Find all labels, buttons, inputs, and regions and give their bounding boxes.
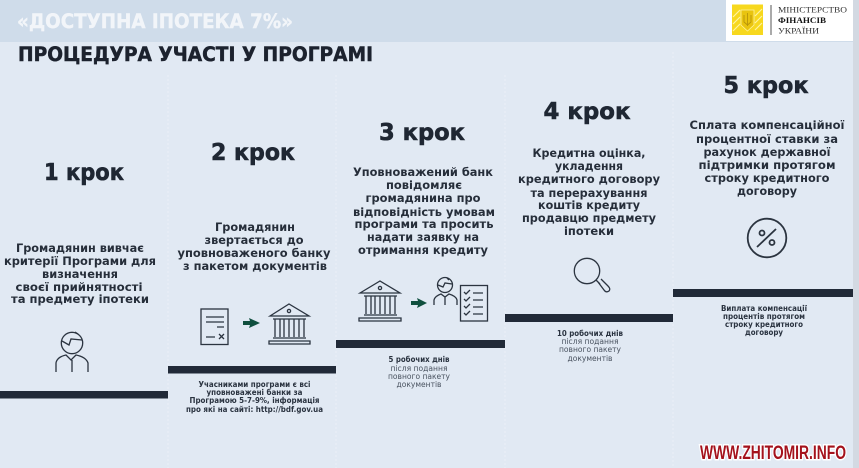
icon: person	[434, 278, 457, 305]
text block: step 3 description: повідомляє	[386, 178, 462, 192]
text block: step 5 description: Сплата компенсаційної	[690, 118, 845, 132]
text block: step 4 note: документів	[568, 353, 613, 363]
heading: 4 крок: 4 крок	[544, 99, 631, 125]
panel: step 5	[673, 73, 853, 337]
text block: step 5 description: договору	[737, 184, 797, 198]
text block: step 4 description: та перерахування	[530, 186, 648, 200]
text block: step 1 description: визначення	[42, 267, 118, 281]
text block: step 4 note: повного пакету	[559, 344, 621, 354]
text block: step 1 description: Громадянин вивчає	[16, 241, 144, 255]
text block: step 5 description	[690, 118, 845, 198]
icon: yellow emblem	[732, 4, 763, 35]
text block: step 3 note: після подання	[390, 363, 448, 373]
heading: 2 крок: 2 крок	[211, 140, 295, 166]
text block: step 4 description: іпотеки	[564, 224, 614, 238]
text block: step 4 note: після подання	[562, 336, 619, 346]
text block: step 4 description: коштів кредиту	[538, 198, 640, 212]
text block: step 5 note: строку кредитного	[725, 319, 803, 329]
bar	[505, 314, 673, 322]
text block: step 3 description: громадянина про	[366, 191, 481, 205]
title: «ДОСТУПНА ІПОТЕКА 7%»	[17, 10, 293, 33]
icon: document	[201, 309, 228, 344]
text block: step 3 description: Уповноважений банк	[353, 165, 493, 179]
icon: checklist	[460, 286, 488, 321]
text block: step 2 note	[186, 379, 323, 414]
text block: step 2 description	[178, 220, 331, 273]
text block: step 5 note: процентів протягом	[723, 311, 805, 321]
text block: step 3 note: документів	[396, 379, 442, 389]
text block: step 3 description: програми та просить	[354, 217, 494, 231]
text block: step 5 description: строку кредитного	[704, 171, 830, 185]
bar	[168, 366, 336, 374]
text block: step 4 description	[518, 146, 660, 238]
text block: step 4 description: Кредитна оцінка,	[532, 146, 646, 160]
text block: step 2 description: з пакетом документів	[183, 259, 327, 273]
arrow	[243, 318, 260, 328]
heading: 5 крок: 5 крок	[724, 73, 809, 99]
text block: step 2 note: про які на сайті: http://bdf.gov.ua	[186, 404, 323, 414]
icon: magnifier	[574, 258, 610, 292]
text block: step 3 description	[353, 165, 495, 257]
text block: step 5 description: підтримки протягом	[698, 158, 836, 172]
text block: step 4 description: кредитного договору	[518, 172, 660, 186]
panel: step 2	[168, 140, 336, 414]
panel: step 3	[336, 120, 505, 389]
text block: step 5 note	[721, 303, 807, 337]
icon: bank	[269, 304, 310, 344]
text block: step 2 note: уповноважені банки за	[206, 387, 302, 397]
text block: step 3 note: 5 робочих днів	[388, 354, 450, 364]
text block: step 5 description: процентної ставки за	[696, 132, 838, 146]
panel: step 4	[505, 99, 673, 363]
logo text: УКРАЇНИ	[778, 26, 819, 36]
bar	[0, 391, 168, 398]
text block: step 4 note: 10 робочих днів	[557, 328, 623, 338]
text block: step 4 description: укладення	[555, 159, 623, 173]
text block: step 2 note: Учасниками програми є всі	[198, 379, 311, 389]
icon: percent	[748, 219, 786, 257]
text block: step 2 description: Громадянин	[215, 220, 295, 234]
text block: step 1 description	[4, 241, 156, 306]
text block: step 1 description: та предмету іпотеки	[11, 292, 149, 306]
bar	[336, 340, 505, 348]
arrow	[411, 298, 427, 308]
text block: step 3 description: відповідність умовам	[353, 205, 495, 219]
header band	[0, 0, 853, 42]
text block: step 3 description: надати заявку на	[367, 230, 479, 244]
logo text	[778, 6, 847, 36]
heading: 1 крок: 1 крок	[44, 160, 124, 186]
text block: step 4 description: продавцю предмету	[522, 211, 656, 225]
heading: 3 крок: 3 крок	[379, 120, 465, 146]
text block: step 5 note: договору	[745, 327, 784, 337]
subtitle: ПРОЦЕДУРА УЧАСТІ У ПРОГРАМІ	[18, 43, 373, 66]
text block: step 3 note	[388, 354, 450, 389]
text block: step 1 description: своєї прийнятності	[16, 280, 142, 294]
logo text: ФІНАНСІВ	[778, 16, 827, 25]
text block: step 5 note: Виплата компенсації	[721, 303, 807, 313]
text block: step 5 description: рахунок державної	[704, 145, 831, 159]
text block: step 3 description: отримання кредиту	[358, 243, 488, 257]
text block: step 4 note	[557, 328, 623, 363]
text block: step 2 description: уповноваженого банку	[178, 246, 331, 260]
logo: Ministry of Finance of Ukraine	[726, 0, 853, 41]
text block: step 3 note: повного пакету	[388, 371, 450, 381]
text block: step 2 description: звертається до	[204, 233, 304, 247]
icon: bank	[359, 281, 401, 321]
text block: step 2 note: Програмою 5-7-9%, інформація	[190, 395, 320, 405]
icon: person	[56, 332, 88, 372]
bar	[673, 289, 853, 297]
panel: step 1	[0, 160, 168, 398]
text block: step 1 description: критерії Програми для	[4, 254, 156, 268]
logo text: МІНІСТЕРСТВО	[778, 6, 847, 14]
